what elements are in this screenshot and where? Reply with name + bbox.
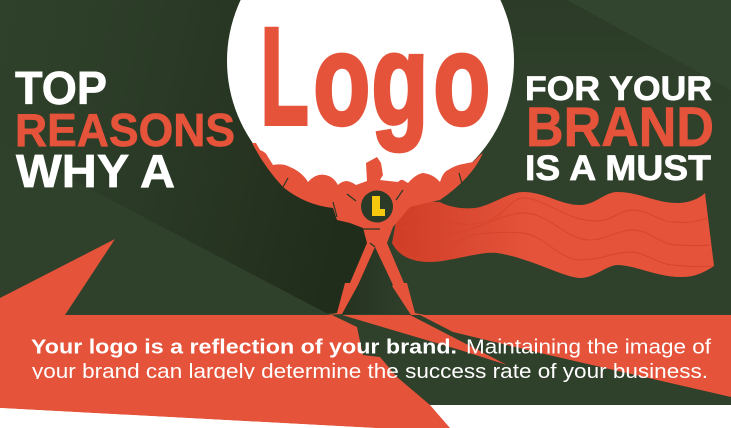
intro text: Maintaining the image of [466, 336, 711, 358]
heading left [15, 62, 235, 197]
intro text: Your logo is a reflection of your brand. [31, 336, 457, 358]
logo circle [227, 0, 514, 204]
emblem letter L [372, 196, 385, 216]
heading right: FOR YOUR [525, 70, 712, 108]
chest emblem [361, 190, 393, 222]
cape [392, 192, 714, 278]
superhero figure [252, 143, 483, 315]
heading right: IS A MUST [525, 149, 711, 188]
red ray centre [342, 315, 507, 365]
logo word: ogo [313, 7, 490, 152]
heading right [525, 70, 714, 188]
shadow between legs [342, 247, 410, 314]
text clipping strip [20, 379, 390, 387]
red ground and arrow shape [0, 239, 450, 428]
heading left: WHY A [16, 145, 175, 197]
white base: lower left [0, 408, 375, 428]
red ground right [420, 315, 731, 397]
heading right: BRAND [526, 95, 714, 158]
logo word: L [261, 0, 308, 153]
heading left: REASONS [15, 104, 235, 156]
darker band beside circle [500, 0, 731, 110]
intro text [31, 336, 711, 383]
diagonal shadow [0, 0, 370, 313]
lighter top right band [567, 0, 731, 90]
intro text: your brand can largely determine the success rate of your business. [32, 360, 708, 383]
white base: lower right [430, 405, 731, 428]
heading left: TOP [15, 62, 107, 114]
